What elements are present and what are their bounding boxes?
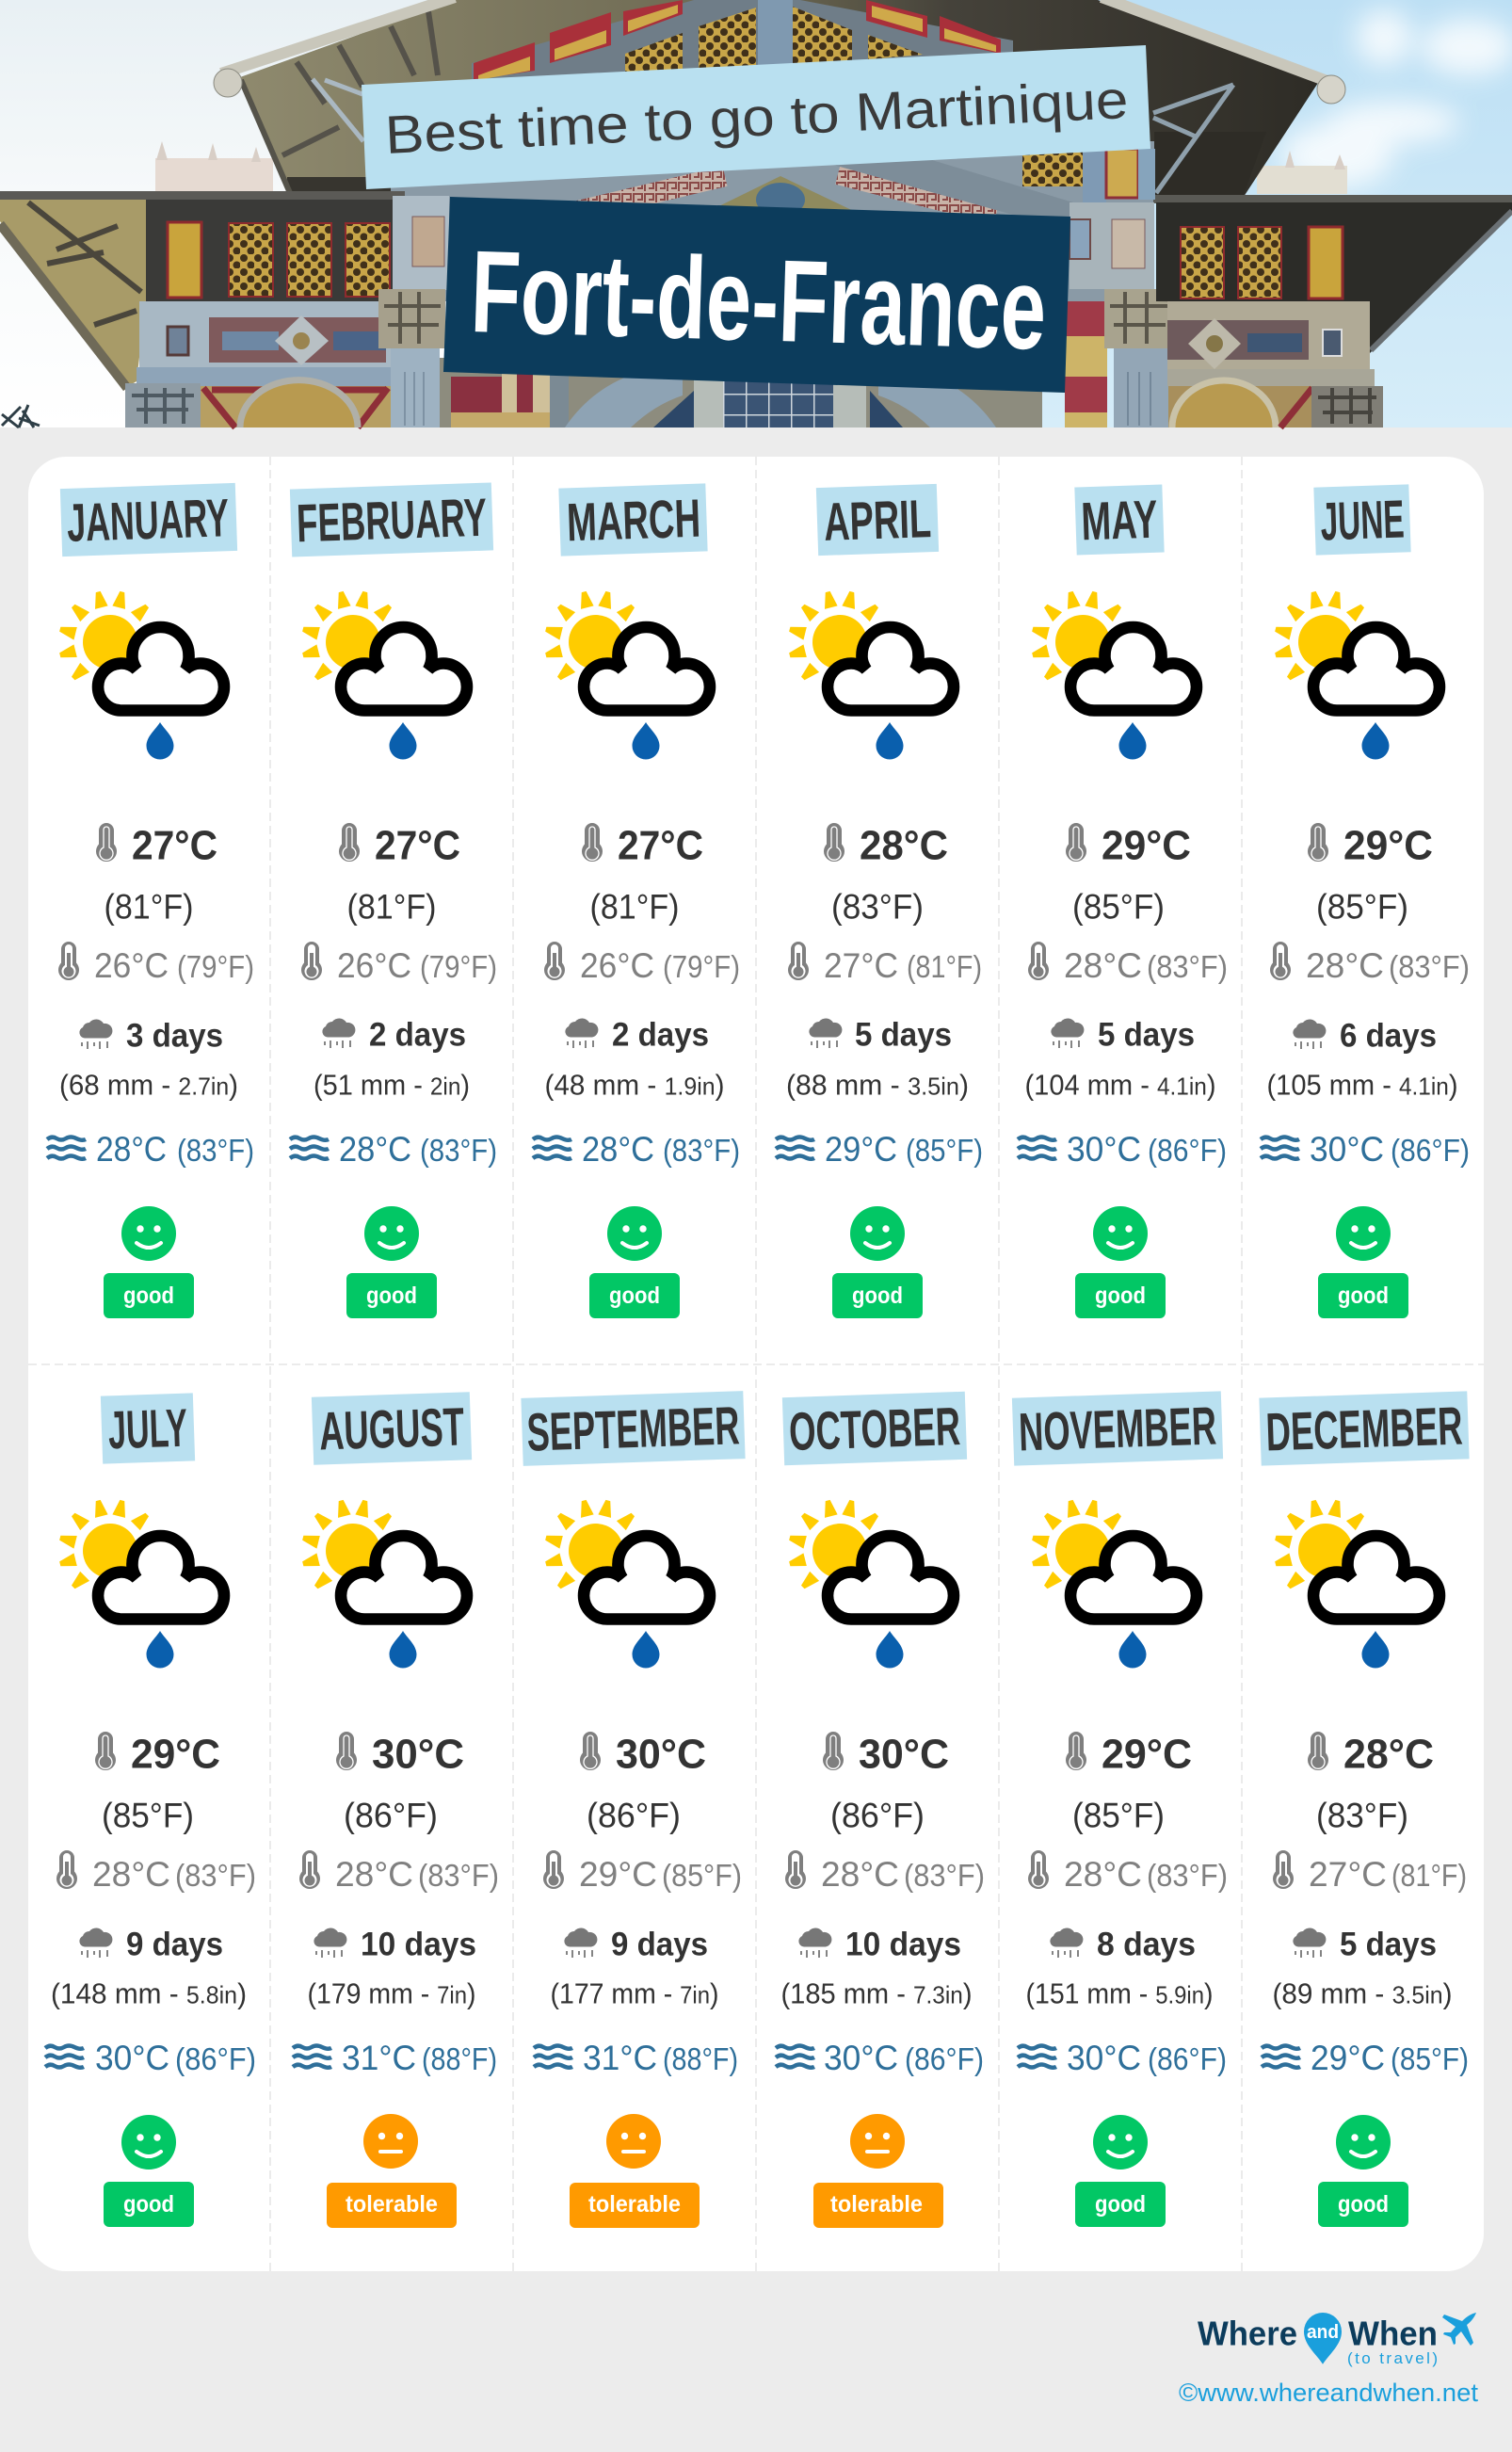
night temperature: (79°F) (663, 949, 740, 984)
sea temperature (1261, 1130, 1470, 1169)
rating: tolerable (570, 2114, 700, 2228)
sea temperature: 30°C (1310, 1130, 1384, 1169)
month: August (293, 1392, 499, 2228)
daytime temperature Fahrenheit: (83°F) (1316, 1797, 1408, 1835)
rainy days (322, 1016, 466, 1053)
month: March (533, 483, 740, 1318)
footer logo: Where and When: and (1307, 2322, 1339, 2343)
rainy days (1051, 1016, 1195, 1053)
footer logo: Where and When: (to travel) (1347, 2349, 1438, 2367)
sea temperature: 30°C (1067, 1130, 1141, 1169)
daytime temperature (582, 823, 703, 868)
sea temperature: 28°C (582, 1130, 654, 1169)
night temperature: (83°F) (1147, 949, 1228, 984)
rating: good (1075, 2115, 1166, 2227)
rainfall: (148 mm - 5.8in) (51, 1977, 247, 2009)
title banner: Fort-de-France (469, 227, 1048, 375)
rating: good: good (1095, 1282, 1146, 1309)
daytime temperature (1308, 823, 1433, 868)
sea temperature (293, 2039, 497, 2077)
month: June (1261, 484, 1470, 1318)
label: May (1074, 484, 1165, 556)
rainy days: 6 days (1340, 1017, 1437, 1054)
sea temperature: 30°C (824, 2039, 898, 2077)
rainy days (1293, 1926, 1437, 1962)
night temperature: 28°C (92, 1855, 170, 1894)
sea temperature: 30°C (95, 2039, 169, 2077)
icon: sun, cloud and rain (58, 590, 224, 759)
rating: tolerable: tolerable (346, 2191, 438, 2218)
night temperature: (83°F) (1389, 949, 1470, 984)
month: April (776, 484, 983, 1318)
night temperature: 28°C (1306, 946, 1384, 985)
sea temperature: (83°F) (663, 1133, 740, 1168)
night temperature: (81°F) (907, 949, 982, 984)
month: October (776, 1392, 985, 2228)
sea temperature: (85°F) (906, 1133, 983, 1168)
night temperature: 27°C (824, 946, 898, 985)
label: January: JANUARY (66, 488, 230, 554)
icon: sun, cloud and rain (788, 1499, 954, 1669)
header photo: Bibliothèque Schoelcher facade (0, 0, 1512, 427)
daytime temperature: 28°C (860, 823, 948, 868)
daytime temperature (339, 823, 460, 868)
rating: good (346, 1206, 437, 1318)
rating: good (1075, 1206, 1166, 1318)
daytime temperature: 27°C (132, 823, 217, 868)
rainfall: (88 mm - 3.5in) (786, 1068, 969, 1102)
footer logo: Where and When: Where (1198, 2315, 1297, 2353)
rating: good: good (609, 1282, 660, 1309)
rating: good (104, 2115, 194, 2227)
icon: sun, cloud and rain (1274, 590, 1440, 759)
night temperature: 28°C (821, 1855, 899, 1894)
rating: good (1318, 2115, 1408, 2227)
sea temperature: (88°F) (422, 2041, 497, 2076)
sea temperature (776, 2039, 984, 2077)
label: April (816, 484, 939, 556)
daytime temperature Fahrenheit: (85°F) (102, 1797, 194, 1835)
label: March (558, 483, 708, 557)
icon: sun, cloud and rain (301, 1499, 467, 1669)
rainfall: (179 mm - 7in) (307, 1977, 475, 2009)
night temperature: 26°C (337, 946, 411, 985)
rainfall: (89 mm - 3.5in) (1272, 1977, 1452, 2009)
rainfall: (185 mm - 7.3in) (781, 1977, 972, 2009)
rainfall: (177 mm - 7in) (550, 1977, 718, 2009)
label: August: AUGUST (318, 1396, 465, 1462)
icon: sun, cloud and rain (58, 1499, 224, 1669)
label: February (290, 482, 493, 557)
rainy days: 10 days (361, 1926, 476, 1962)
label: July: JULY (107, 1398, 188, 1460)
night temperature: (83°F) (418, 1858, 499, 1893)
daytime temperature: 30°C (859, 1731, 949, 1778)
rating: good: good (852, 1282, 903, 1309)
night temperature (1028, 1850, 1228, 1894)
month: November (1012, 1391, 1228, 2227)
label: June: JUNE (1319, 490, 1406, 552)
sea temperature: (83°F) (177, 1133, 254, 1168)
month: January (47, 483, 254, 1318)
night temperature: (79°F) (420, 949, 497, 984)
sea temperature (533, 1130, 740, 1169)
sea temperature: 31°C (583, 2039, 657, 2077)
daytime temperature: 29°C (1102, 823, 1191, 868)
daytime temperature Fahrenheit: (86°F) (587, 1797, 681, 1835)
label: March: MARCH (566, 489, 701, 553)
month: September (521, 1391, 746, 2228)
icon: sun, cloud and rain (301, 590, 467, 759)
night temperature: 28°C (1064, 1855, 1142, 1894)
sea temperature (47, 1130, 254, 1169)
rainy days: 8 days (1097, 1926, 1196, 1962)
rating: good: good (1338, 1282, 1389, 1309)
night temperature: (85°F) (662, 1858, 742, 1893)
footer logo: Where and When (1198, 2313, 1476, 2367)
rainy days (798, 1926, 961, 1962)
rating: tolerable (813, 2114, 943, 2228)
month: May (1018, 484, 1228, 1318)
rating: tolerable (327, 2114, 457, 2228)
daytime temperature: 30°C (616, 1731, 706, 1778)
night temperature (544, 942, 740, 985)
sea temperature: (88°F) (663, 2041, 738, 2076)
icon: sun, cloud and rain (1274, 1499, 1440, 1669)
sea temperature (534, 2039, 738, 2077)
label: September (521, 1391, 746, 1466)
daytime temperature (1066, 823, 1191, 868)
rating: tolerable: tolerable (830, 2191, 923, 2218)
rainfall: (68 mm - 2.7in) (59, 1068, 238, 1102)
daytime temperature Fahrenheit: (81°F) (346, 888, 437, 927)
rainy days (564, 1926, 708, 1962)
daytime temperature (95, 1731, 220, 1778)
night temperature (543, 1850, 742, 1894)
label: November: NOVEMBER (1018, 1396, 1217, 1462)
subtitle banner (362, 45, 1150, 189)
night temperature: 27°C (1309, 1855, 1387, 1894)
sea temperature: 28°C (96, 1130, 167, 1169)
copyright URL: ©www.whereandwhen.net (1179, 2379, 1478, 2407)
icon: sun, cloud and rain (788, 590, 954, 759)
month: December (1259, 1391, 1470, 2227)
icon: map pin (1304, 2313, 1342, 2364)
night temperature: 28°C (1064, 946, 1142, 985)
daytime temperature (824, 823, 948, 868)
sea temperature: (86°F) (905, 2041, 984, 2076)
rainy days: 2 days (612, 1016, 709, 1053)
rating: good (832, 1206, 923, 1318)
daytime temperature: 28°C (1343, 1731, 1434, 1778)
rainfall: (105 mm - 4.1in) (1267, 1068, 1457, 1102)
sea temperature (1018, 1130, 1227, 1169)
icon: airplane (1442, 2313, 1476, 2346)
daytime temperature: 30°C (372, 1731, 464, 1778)
daytime temperature Fahrenheit: (81°F) (104, 888, 194, 927)
night temperature: (81°F) (1391, 1858, 1467, 1893)
rainfall: (151 mm - 5.9in) (1026, 1977, 1213, 2009)
sea temperature: (85°F) (1391, 2041, 1469, 2076)
subtitle banner: Best time to go to Martinique (384, 70, 1130, 166)
rainy days (79, 1017, 223, 1054)
sea temperature: (86°F) (1391, 1133, 1470, 1168)
daytime temperature Fahrenheit: (83°F) (831, 888, 924, 927)
rainy days (79, 1926, 223, 1962)
rating: good (589, 1206, 680, 1318)
label: August (312, 1392, 472, 1465)
rainy days (1050, 1926, 1196, 1962)
footer logo: Where and When: When (1348, 2315, 1438, 2353)
rainfall: (104 mm - 4.1in) (1024, 1068, 1216, 1102)
icon: sun, cloud and rain (1031, 590, 1197, 759)
night temperature: 26°C (94, 946, 169, 985)
daytime temperature Fahrenheit: (85°F) (1072, 888, 1165, 927)
rating: good: good (366, 1282, 417, 1309)
rating: good (104, 1206, 194, 1318)
night temperature (1028, 942, 1228, 985)
label: September: SEPTEMBER (526, 1395, 741, 1463)
rating: good: good (1095, 2191, 1146, 2218)
daytime temperature Fahrenheit: (85°F) (1316, 888, 1408, 927)
sea temperature: 29°C (825, 1130, 897, 1169)
night temperature (299, 1850, 499, 1894)
night temperature: 29°C (579, 1855, 657, 1894)
sea temperature (776, 1130, 983, 1169)
night temperature (785, 1850, 985, 1894)
label: October: OCTOBER (788, 1396, 961, 1462)
night temperature (1273, 1850, 1467, 1894)
label: May: MAY (1080, 490, 1159, 552)
night temperature: (83°F) (1147, 1858, 1228, 1893)
night temperature (58, 942, 254, 985)
sea temperature: 29°C (1311, 2039, 1385, 2077)
label: November (1012, 1391, 1223, 1466)
label: July (101, 1393, 195, 1464)
daytime temperature: 29°C (131, 1731, 220, 1778)
daytime temperature Fahrenheit: (86°F) (344, 1797, 438, 1835)
night temperature: (83°F) (904, 1858, 985, 1893)
night temperature (788, 942, 982, 985)
rating: good: good (123, 2191, 174, 2218)
rating: tolerable: tolerable (588, 2191, 681, 2218)
daytime temperature: 29°C (1343, 823, 1433, 868)
night temperature: (83°F) (175, 1858, 256, 1893)
label: October (782, 1392, 967, 1465)
month: February (290, 482, 497, 1318)
rainy days: 5 days (1098, 1016, 1195, 1053)
rainy days (1293, 1017, 1437, 1054)
rainfall: (48 mm - 1.9in) (544, 1068, 725, 1102)
rainy days: 9 days (126, 1926, 223, 1962)
rating: good (1318, 1206, 1408, 1318)
night temperature (301, 942, 497, 985)
title banner (443, 197, 1070, 393)
sea temperature: 30°C (1067, 2039, 1141, 2077)
night temperature: 28°C (335, 1855, 413, 1894)
icon: sun, cloud and rain (1031, 1499, 1197, 1669)
icon: sun, cloud and rain (544, 1499, 710, 1669)
night temperature (56, 1850, 256, 1894)
sea temperature (1262, 2039, 1469, 2077)
daytime temperature Fahrenheit: (81°F) (589, 888, 680, 927)
night temperature: 26°C (580, 946, 654, 985)
rating: good: good (1338, 2191, 1389, 2218)
sea temperature: (83°F) (420, 1133, 497, 1168)
sea temperature: (86°F) (175, 2041, 256, 2076)
night temperature (1270, 942, 1470, 985)
rainy days: 2 days (369, 1016, 466, 1053)
label: April: APRIL (823, 489, 932, 553)
rainy days: 5 days (855, 1016, 952, 1053)
sea temperature: 31°C (342, 2039, 416, 2077)
rainy days: 10 days (845, 1926, 961, 1962)
rainy days (565, 1016, 709, 1053)
rainy days (809, 1016, 952, 1053)
icon: sun, cloud and rain (544, 590, 710, 759)
month: July (45, 1393, 256, 2227)
rainy days: 5 days (1340, 1926, 1437, 1962)
sea temperature: (86°F) (1148, 1133, 1227, 1168)
label: February: FEBRUARY (296, 488, 488, 554)
label: January (60, 483, 237, 557)
sea temperature (290, 1130, 497, 1169)
daytime temperature Fahrenheit: (86°F) (830, 1797, 925, 1835)
rating: good: good (123, 1282, 174, 1309)
rainfall: (51 mm - 2in) (314, 1068, 470, 1102)
sea temperature (1018, 2039, 1227, 2077)
night temperature: (79°F) (177, 949, 254, 984)
rainy days: 3 days (126, 1017, 223, 1054)
daytime temperature: 29°C (1102, 1731, 1192, 1778)
rainy days: 9 days (611, 1926, 708, 1962)
daytime temperature: 27°C (618, 823, 703, 868)
daytime temperature: 27°C (375, 823, 460, 868)
daytime temperature Fahrenheit: (85°F) (1072, 1797, 1165, 1835)
rainy days (314, 1926, 476, 1962)
sea temperature: (86°F) (1148, 2041, 1227, 2076)
sea temperature (45, 2039, 256, 2077)
daytime temperature (96, 823, 217, 868)
label: June (1313, 484, 1411, 556)
sea temperature: 28°C (339, 1130, 411, 1169)
panel: monthly climate table (28, 457, 1484, 2271)
